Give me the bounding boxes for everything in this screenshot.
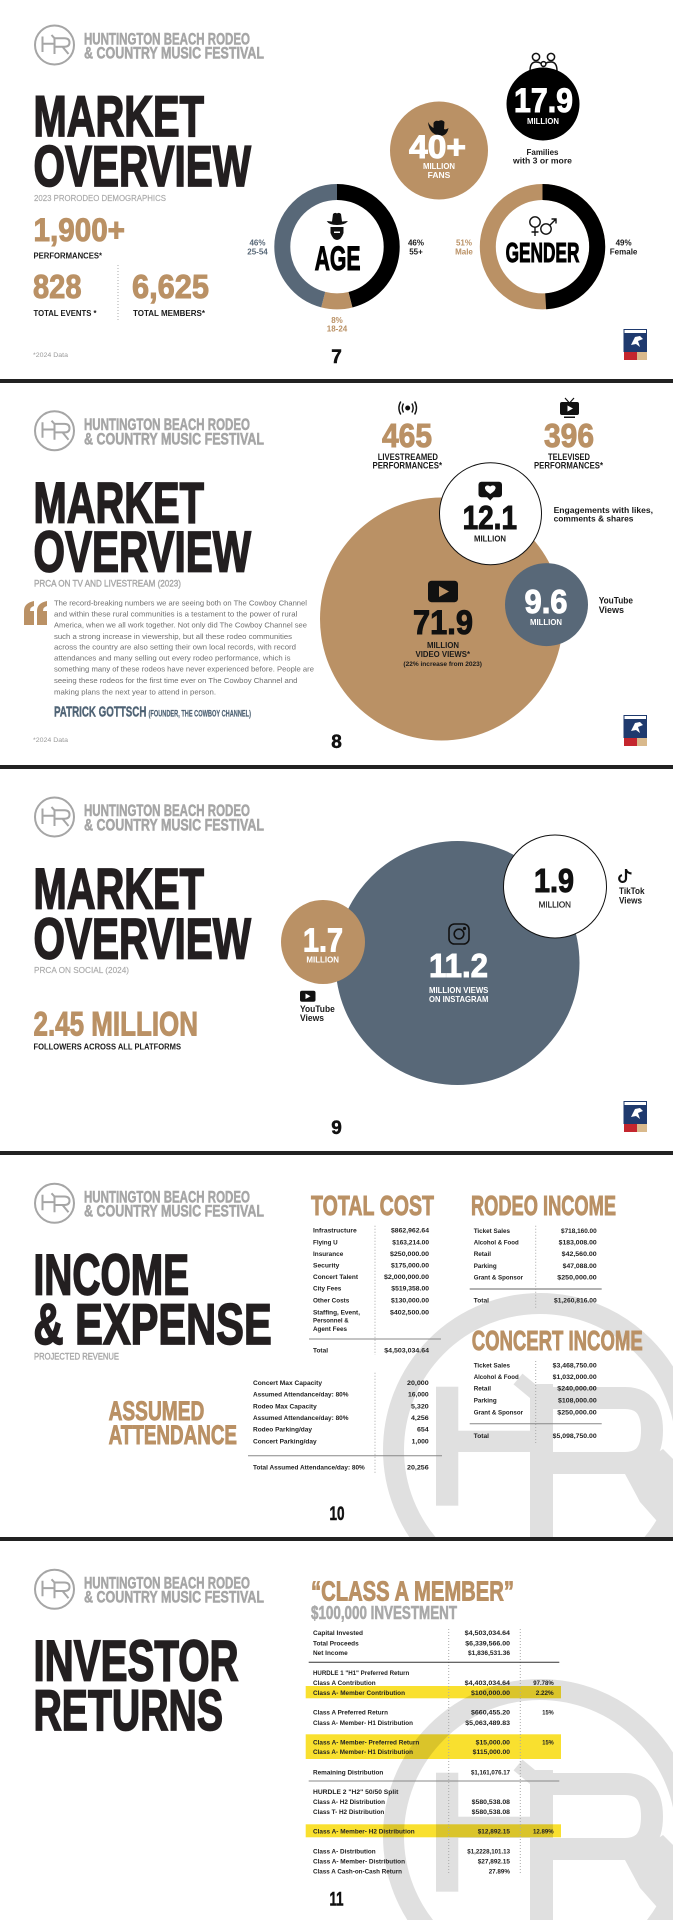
quote text: attendances and many selling out every rodeo performance, which is [54,654,291,663]
table: total cost: $175,000.00 [391,1262,429,1269]
table: investor returns: Capital Invested [313,1630,363,1637]
table: rodeo income: Retail [474,1251,491,1258]
watermark logo [383,1293,673,1537]
footnote: *2024 Data [33,737,68,744]
bubble: 9.6 million youtube views [505,563,633,646]
stat: followers: 2.45 MILLION [34,1006,198,1044]
festival name: & COUNTRY MUSIC FESTIVAL [84,45,264,63]
donut: gender: Male [455,247,473,256]
festival name: HUNTINGTON BEACH RODEO [84,802,250,820]
title: INCOME [34,1243,189,1307]
icon: broadcast [399,402,416,414]
table: total cost: $250,000.00 [390,1251,429,1258]
panel: market overview demographics [33,26,647,368]
donut: age: 8% [331,316,343,325]
table: investor returns: 27.89% [489,1868,510,1875]
table: total cost: $519,358.00 [391,1286,429,1293]
stat: televised performances: PERFORMANCES* [534,461,603,471]
icon: video play [428,581,458,602]
table: total cost: Other Costs [313,1298,350,1305]
page number: 10 [330,1504,344,1525]
table: investor returns: 97.78% [533,1680,554,1687]
bubble: 17.9 million families: MILLION [527,116,559,126]
bubble: 17.9 million families: Families [526,148,559,157]
stat: televised performances [534,398,603,471]
bubble: 11.2 million instagram views [336,841,580,1085]
festival name: & COUNTRY MUSIC FESTIVAL [84,430,264,448]
title: & EXPENSE [34,1293,272,1357]
table: assumed attendance: Total Assumed Attendance/day: 80% [253,1465,365,1472]
table: concert income: Alcohol & Food [474,1374,519,1381]
icon: youtube [300,991,316,1002]
table: investor returns: 2.22% [536,1690,554,1697]
bubble: 9.6 million youtube views: 9.6 [524,584,568,621]
table: rodeo income: $718,160.00 [561,1228,597,1235]
bubble: 9.6 million youtube views: MILLION [530,617,562,627]
table: total cost: Flying U [313,1239,338,1246]
panel: market overview tv and livestream [24,398,653,753]
heading: class a member [311,1576,514,1623]
bubble: 71.9 million video views: VIDEO VIEWS* [416,649,471,659]
icon: gender symbols [530,217,556,236]
festival name [84,1574,264,1607]
table: assumed attendance: Assumed Attendance/day: 80% [253,1415,349,1422]
table: investor returns: $660,455.20 [471,1710,510,1717]
table: investor returns: $6,339,566.00 [465,1640,510,1647]
quote text: and within these rural communities is a testament to the power of rural [54,610,298,619]
stat: livestreamed performances: LIVESTREAMED [378,452,438,462]
donut: age: 46% [408,239,424,248]
table: investor returns: $27,892.15 [478,1859,510,1866]
title [34,85,252,199]
festival name [84,802,264,834]
quote text: The record-breaking numbers we are seeing both on The Cowboy Channel [54,599,307,608]
table: concert income: Parking [474,1398,497,1405]
table: total cost: $130,000.00 [391,1298,429,1305]
icon: tv [560,398,579,418]
table: concert income: Retail [474,1386,491,1393]
bubble: 40+ million fans: MILLION [423,161,455,171]
title: RETURNS [34,1679,223,1743]
table: investor returns: HURDLE 2 "H2" 50/50 Split [313,1789,399,1796]
title: OVERVIEW [34,521,252,585]
bubble: 1.9 million tiktok views: Views [619,895,642,905]
bubble: 40+ million fans [390,102,488,200]
table: investor returns: 12.89% [533,1829,554,1836]
table: concert income: Total [474,1433,489,1440]
table: assumed attendance: 1,000 [412,1439,429,1446]
quote text: seeing these rodeos for the first time ever on The Cowboy Channel and [54,676,297,685]
stat: total events: 828 [33,269,82,306]
festival name: & COUNTRY MUSIC FESTIVAL [84,816,264,834]
festival name: HUNTINGTON BEACH RODEO [84,1188,250,1206]
table: total cost [309,1190,441,1355]
table: assumed attendance: Concert Max Capacity [253,1380,322,1387]
title [34,471,252,585]
bubble: 71.9 million video views: (22% increase from 2023) [403,661,482,668]
bubble: 1.7 million youtube views: 1.7 [303,923,343,960]
table: assumed attendance: Concert Parking/day [253,1439,317,1446]
icon: prorodeo badge [624,329,647,360]
title: MARKET [34,471,204,535]
table: total cost: Concert Talent [313,1274,359,1281]
page number: 11 [330,1890,344,1911]
bubble: 1.7 million youtube views: Views [300,1013,324,1023]
stat: performances: 1,900+ [34,212,125,248]
table: investor returns [309,1629,559,1875]
donut: age: 55+ [409,247,423,256]
table: total cost: City Fees [313,1286,342,1293]
table: total cost: $163,214.00 [392,1239,429,1246]
table: assumed attendance: Rodeo Parking/day [253,1427,312,1434]
bubble: 12.1 million engagements: Engagements with likes, [554,505,653,515]
table: investor returns: $100,000.00 [471,1690,510,1697]
donut: age: 46% [249,239,266,248]
subtitle: PRCA ON TV AND LIVESTREAM (2023) [34,579,181,589]
brand logo [35,411,74,450]
heading: assumed attendance: ATTENDANCE [109,1420,237,1450]
bubble: 71.9 million video views: MILLION [427,640,459,650]
festival name [84,416,264,448]
title [34,1243,272,1357]
table: total cost: TOTAL COST [311,1190,434,1221]
table: total cost: Insurance [313,1251,344,1258]
icon: family [530,53,557,71]
table: investor returns: $1,2228,101.13 [467,1849,510,1856]
table: total cost: $862,962.64 [391,1227,429,1234]
bubble: 12.1 million engagements [440,463,653,565]
donut: age: AGE [315,240,361,278]
donut: gender: GENDER [506,237,579,268]
table: investor returns: Class A- Member- Preferred Return [313,1739,419,1746]
table: rodeo income: Ticket Sales [474,1228,510,1235]
table: assumed attendance: 20,256 [407,1465,429,1472]
stat: televised performances: TELEVISED [548,452,590,462]
bubble: 17.9 million families [506,53,580,166]
table: investor returns: $4,503,034.64 [465,1630,510,1637]
table: investor returns: Class A- Member- Distribution [313,1859,405,1866]
stat: livestreamed performances: PERFORMANCES* [372,461,442,471]
bubble: 40+ million fans: 40+ [409,129,466,165]
table: rodeo income: $250,000.00 [557,1275,597,1282]
bubble: 9.6 million youtube views: Views [599,605,624,615]
table: concert income: $3,468,750.00 [553,1363,597,1370]
table: assumed attendance: 4,256 [411,1415,429,1422]
donut: age: 25-54 [247,247,268,256]
table: investor returns: Class A Preferred Return [313,1710,388,1717]
festival name [84,1188,264,1221]
bubble: 1.7 million youtube views: YouTube [300,1004,335,1014]
title [34,1630,239,1743]
bubble: 12.1 million engagements: 12.1 [463,500,517,537]
stat: followers [34,1006,198,1052]
quote attribution: PATRICK GOTTSCH [54,704,146,721]
table: assumed attendance: Assumed Attendance/day: 80% [253,1392,349,1399]
table: rodeo income: $1,260,816.00 [554,1298,597,1305]
watermark logo [394,1690,673,1920]
table: rodeo income: Parking [474,1263,497,1270]
stat: performances: PERFORMANCES* [34,252,103,261]
table: investor returns: Class A- Member- H1 Distribution [313,1749,413,1756]
quote text: making plans the next year to attend in person. [54,687,216,696]
stat: televised performances: 396 [544,418,594,455]
footnote: *2024 Data [33,352,68,359]
icon: prorodeo badge [624,715,647,746]
table: investor returns: $1,161,076.17 [471,1769,510,1776]
subtitle: PROJECTED REVENUE [34,1351,119,1361]
bubble: 71.9 million video views: 71.9 [413,604,473,642]
bubble: 17.9 million families: 17.9 [514,82,573,120]
stat: total members: 6,625 [132,269,209,306]
table: rodeo income: $47,088.00 [563,1263,597,1270]
stat: livestreamed performances [372,402,442,471]
bubble: 12.1 million engagements: comments & shares [554,513,634,523]
icon: cowboy hat [428,120,448,136]
icon: bearded cowboy [327,213,348,240]
table: investor returns: 15% [542,1739,554,1746]
bubble: 1.9 million tiktok views: TikTok [619,886,645,896]
title: INVESTOR [34,1630,239,1694]
icon: like notification [478,482,502,500]
table: assumed attendance: 20,000 [407,1380,429,1387]
subtitle: 2023 PRORODEO DEMOGRAPHICS [34,193,166,203]
table: total cost: Agent Fees [313,1326,347,1333]
table: total cost: $4,503,034.64 [384,1348,429,1355]
table: investor returns: Class T- H2 Distribution [313,1809,384,1816]
panel: income and expense [34,1182,673,1537]
title: MARKET [34,857,204,921]
title: MARKET [34,85,204,149]
festival name [84,30,264,63]
quote text: something many of these rodeos have never experienced before. People are [54,665,314,674]
bubble: 11.2 million instagram views: MILLION VIEWS [429,985,489,995]
quote text: such a strong increase in viewership, but all these rodeo communities [54,632,292,641]
table: total cost: Staffing, Event, [313,1309,360,1316]
table: rodeo income: Grant & Sponsor [474,1275,523,1282]
bubble: 1.9 million tiktok views: 1.9 [534,863,574,900]
table: investor returns: $5,063,489.83 [465,1720,510,1727]
bubble: 1.9 million tiktok views [504,835,645,938]
bubble: 11.2 million instagram views: 11.2 [429,948,488,985]
panel: investor returns [34,1570,673,1920]
table: concert income: $240,000.00 [557,1386,597,1393]
heading: assumed attendance: ASSUMED [109,1396,204,1426]
table: investor returns: $1,836,531.36 [468,1650,510,1657]
title: OVERVIEW [34,135,252,199]
table: investor returns: $15,000.00 [476,1739,510,1746]
table: concert income: Ticket Sales [474,1363,510,1370]
heading: class a member: “CLASS A MEMBER” [311,1576,514,1607]
bubble: 12.1 million engagements: MILLION [474,534,506,544]
table: total cost: Personnel & [313,1318,349,1325]
table: assumed attendance: 654 [417,1427,429,1434]
table: investor returns: Class A- Distribution [313,1849,376,1856]
panel: market overview social [34,798,647,1139]
bubble: 71.9 million video views [320,498,563,740]
title [34,857,252,971]
donut: gender: Female [610,247,638,256]
icon: prorodeo badge [624,1101,647,1132]
table: investor returns: Total Proceeds [313,1640,359,1647]
heading: assumed attendance [109,1396,237,1450]
donut: age [247,192,424,334]
festival name: HUNTINGTON BEACH RODEO [84,30,250,48]
bubble: 1.7 million youtube views: MILLION [306,955,339,965]
table: investor returns: $115,000.00 [473,1749,510,1756]
table: concert income: $108,000.00 [558,1398,597,1405]
brand logo [35,1184,74,1223]
table: concert income: Grant & Sponsor [474,1409,523,1416]
table: total cost: $402,500.00 [390,1309,429,1316]
table: investor returns: Remaining Distribution [313,1769,383,1776]
table: concert income: $250,000.00 [557,1409,597,1416]
heading: class a member: $100,000 INVESTMENT [311,1602,458,1623]
table highlights [306,1686,561,1837]
page number: 9 [331,1118,342,1139]
table: investor returns: Class A Contribution [313,1680,376,1687]
table: total cost: Total [313,1348,328,1355]
table: investor returns: Class A Cash-on-Cash Return [313,1868,402,1875]
table: investor returns: 15% [542,1710,554,1717]
page number: 8 [331,732,342,753]
table: rodeo income: Total [474,1298,489,1305]
bubble: 9.6 million youtube views: YouTube [599,596,633,606]
table: assumed attendance [248,1373,442,1473]
stat: performances [34,212,125,261]
subtitle: PRCA ON SOCIAL (2024) [34,965,129,975]
stat: livestreamed performances: 465 [382,418,432,455]
table: concert income [470,1325,643,1443]
bubble: 1.7 million youtube views [281,900,365,1023]
brand logo [35,1570,74,1609]
brand logo [35,798,74,836]
quote text: America, when we all work together. Not only did The Cowboy Channel see [54,621,307,630]
table: investor returns: Class A- Member- H1 Distribution [313,1720,413,1727]
table: investor returns: Class A- H2 Distribution [313,1799,385,1806]
table: investor returns: $12,892.15 [478,1829,510,1836]
table: rodeo income [470,1190,616,1308]
bubble: 11.2 million instagram views: ON INSTAGRAM [429,994,488,1004]
quote text [54,599,314,696]
donut: gender [455,192,638,301]
donut: gender: 49% [616,239,632,248]
table: rodeo income: $183,008.00 [559,1239,597,1246]
festival name: HUNTINGTON BEACH RODEO [84,416,250,434]
table: total cost: Security [313,1262,340,1269]
bubble: 17.9 million families: with 3 or more [512,157,573,166]
table: rodeo income: $42,560.00 [562,1251,597,1258]
table: investor returns: $4,403,034.64 [465,1680,510,1687]
icon: tiktok [619,869,632,882]
quote attribution: (FOUNDER, THE COWBOY CHANNEL) [148,709,251,719]
festival name: HUNTINGTON BEACH RODEO [84,1574,250,1592]
table: total cost: $2,000,000.00 [384,1274,429,1281]
donut: age: 18-24 [327,325,348,334]
table: concert income: $1,032,000.00 [553,1374,597,1381]
table: total cost: Infrastructure [313,1227,357,1234]
bubble: 40+ million fans: FANS [428,170,451,180]
stat: followers: FOLLOWERS ACROSS ALL PLATFORMS [34,1043,182,1052]
table: rodeo income: Alcohol & Food [474,1239,519,1246]
page number: 7 [331,347,342,368]
donut: gender: 51% [456,239,472,248]
stat: total events [33,269,97,318]
table: investor returns: $580,538.08 [472,1799,510,1806]
table: investor returns: Class A- Member Contribution [313,1690,405,1697]
table: assumed attendance: 16,000 [408,1392,429,1399]
bubble: 1.9 million tiktok views: MILLION [539,900,571,910]
quote text: across the country are also setting their own local records, with record [54,643,296,652]
festival name: & COUNTRY MUSIC FESTIVAL [84,1203,264,1221]
festival name: & COUNTRY MUSIC FESTIVAL [84,1589,264,1607]
icon: instagram [449,924,469,944]
stat: total members: TOTAL MEMBERS* [133,309,206,318]
stat: total events: TOTAL EVENTS * [34,309,97,318]
icon: quotation mark [24,601,47,625]
table: assumed attendance: 5,320 [411,1403,429,1410]
table: investor returns: Class A- Member- H2 Distribution [313,1829,415,1836]
table: investor returns: $580,538.08 [472,1809,510,1816]
table: assumed attendance: Rodeo Max Capacity [253,1403,317,1410]
title: OVERVIEW [34,907,252,971]
table: concert income: $5,098,750.00 [553,1433,597,1440]
brand logo [35,26,74,64]
table: investor returns: HURDLE 1 "H1" Preferred Return [313,1670,409,1677]
table: investor returns: Net Income [313,1650,348,1657]
